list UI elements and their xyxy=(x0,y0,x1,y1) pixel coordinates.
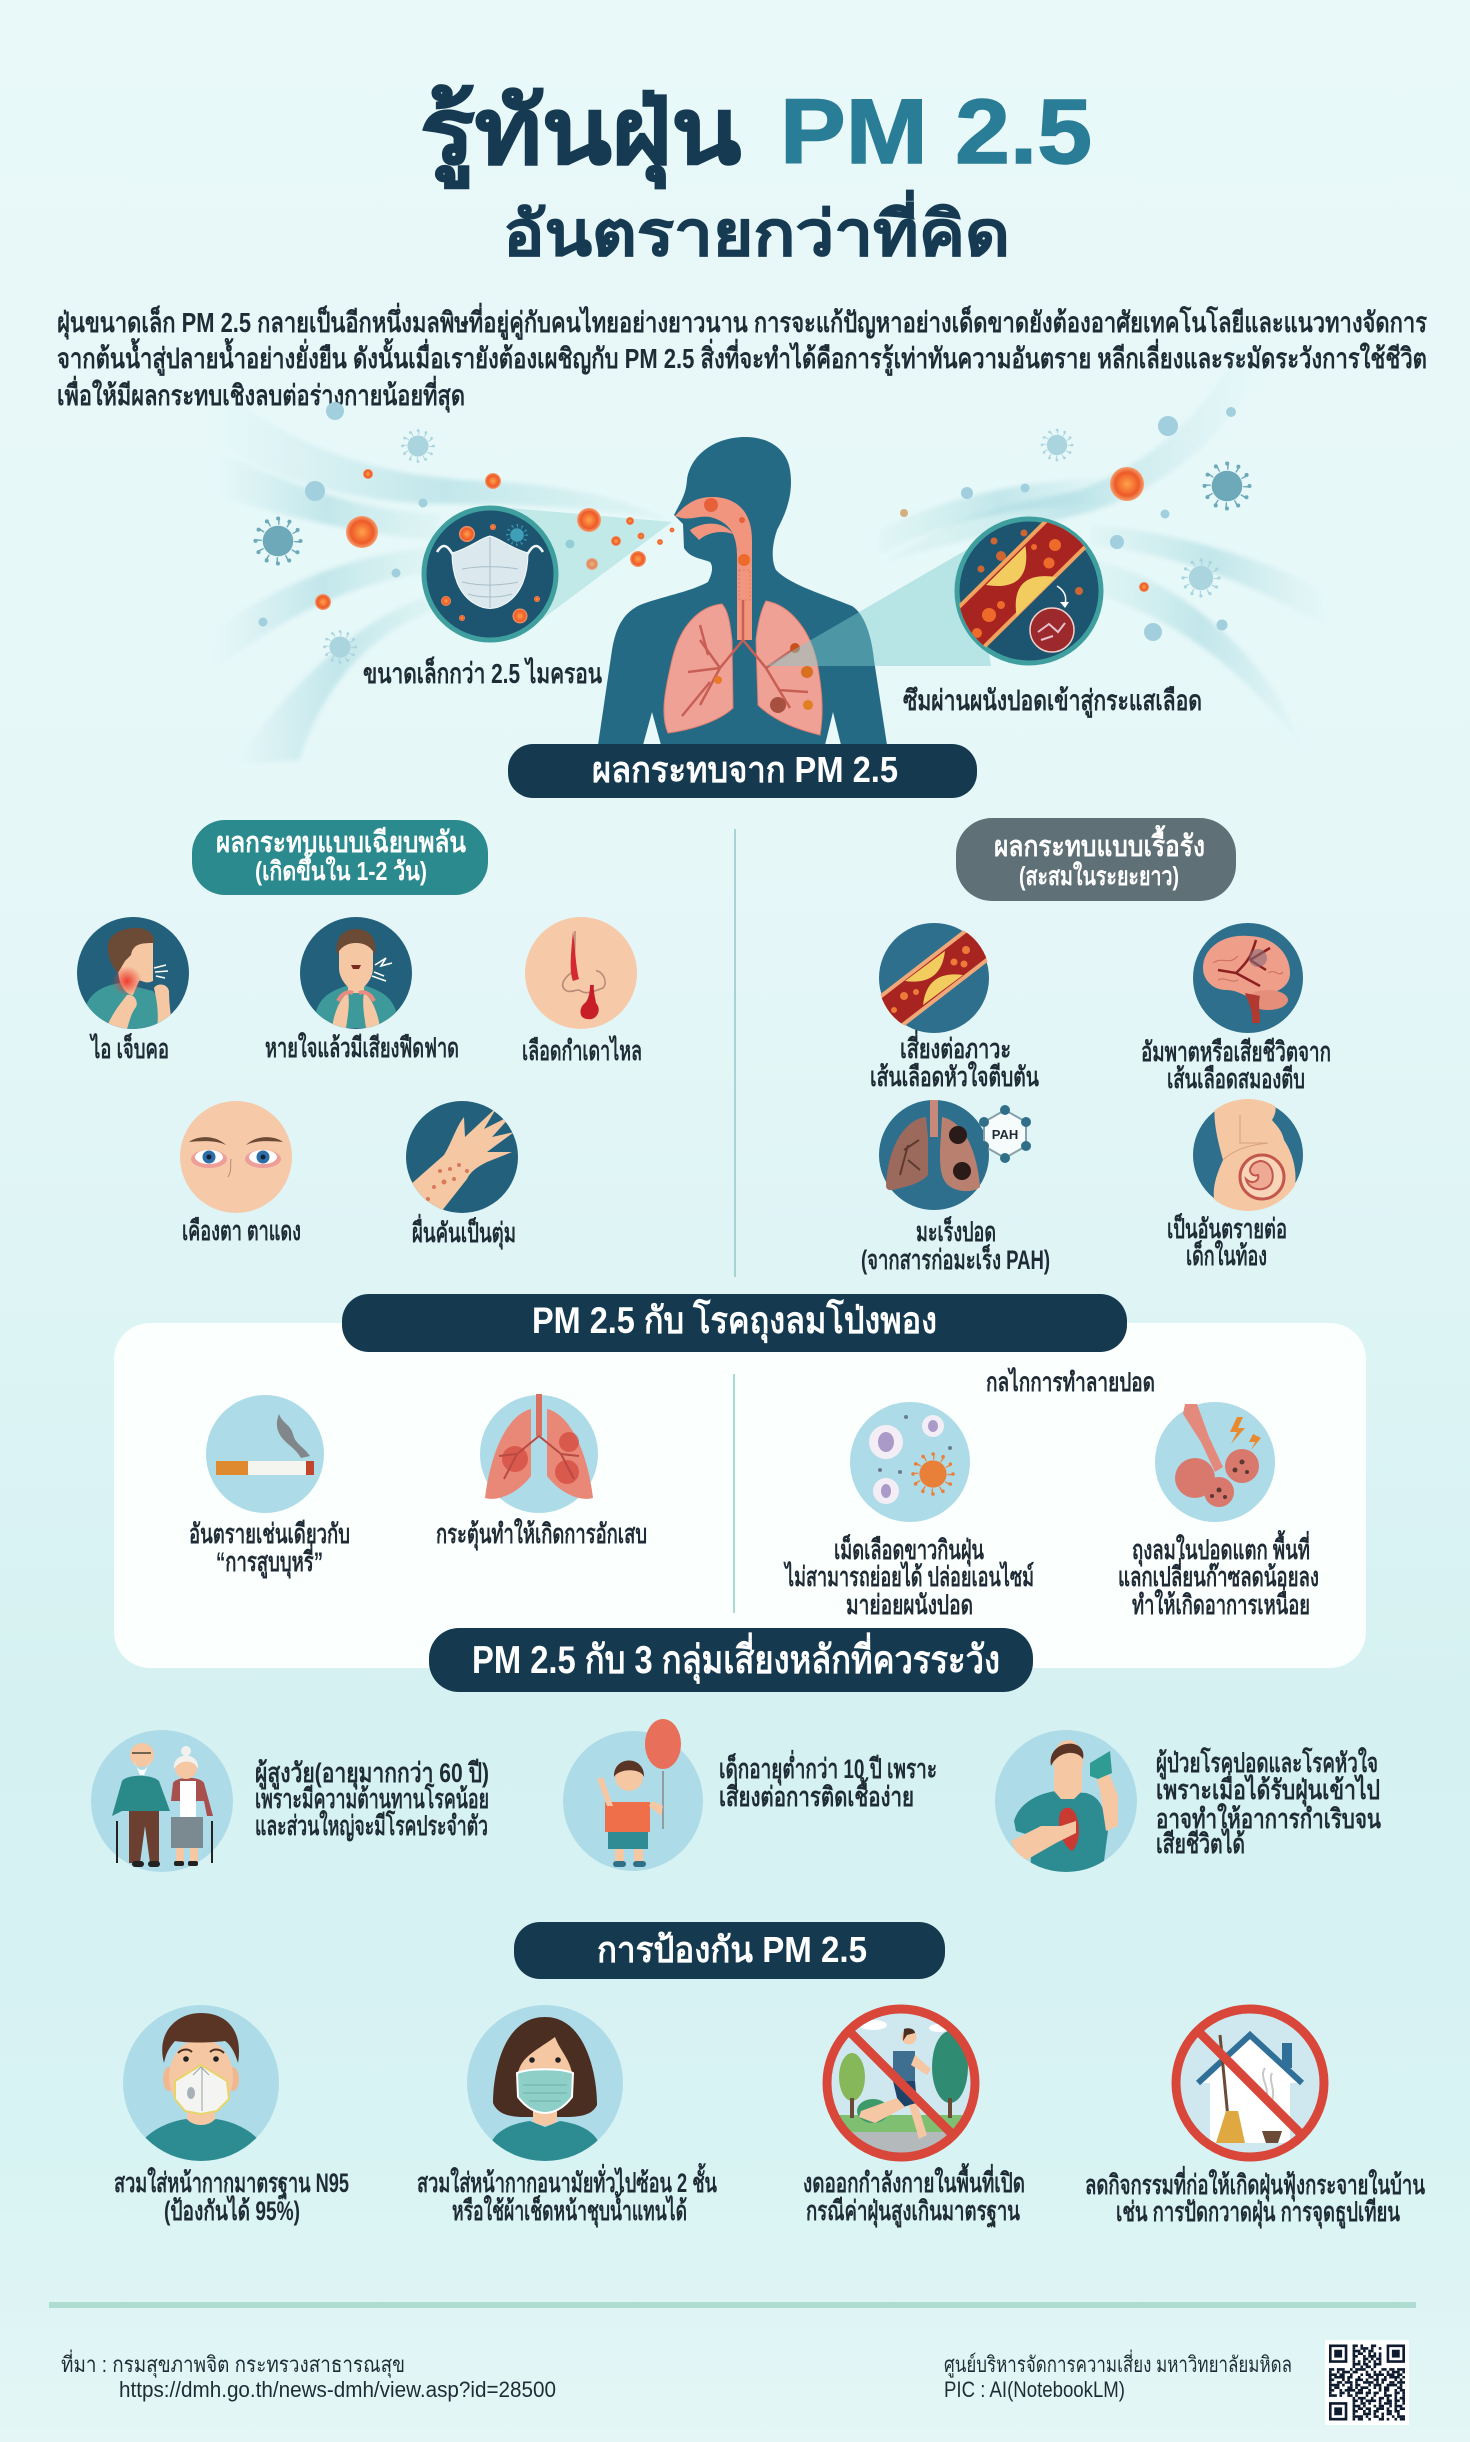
icon: elderly couple xyxy=(91,1730,233,1872)
icon: rash xyxy=(402,1101,518,1217)
label: alveoli: แลกเปลี่ยนก๊าซลดน้อยลง xyxy=(1118,1557,1319,1592)
label: nosebleed: เลือดกำเดาไหล xyxy=(522,1035,642,1066)
intro paragraph: เพื่อให้มีผลกระทบเชิงลบต่อร่างกายน้อยที่สุด xyxy=(57,375,465,413)
label: enters bloodstream: ซึมผ่านผนังปอดเข้าสู่กระแสเลือด xyxy=(903,685,1202,718)
text: elderly xyxy=(255,1758,489,1842)
label: lung cancer: (จากสารก่อมะเร็ง PAH) xyxy=(861,1242,1050,1275)
label: lung cancer: มะเร็งปอด xyxy=(916,1214,996,1247)
label: lung cancer xyxy=(861,1214,1050,1275)
heading: chronic effects xyxy=(956,818,1236,901)
mask circle xyxy=(424,508,556,640)
label: like smoking: อันตรายเช่นเดียวกับ xyxy=(189,1519,350,1549)
icon: patient with inhaler xyxy=(995,1730,1137,1876)
text: patients: อาจทำให้อาการกำเริบจน xyxy=(1156,1803,1381,1834)
text: surgical mask: สวมใส่หน้ากากอนามัยทั่วไปซ้อน 2 ชั้น xyxy=(417,2162,717,2198)
label: alveoli: ทำให้เกิดอาการเหนื่อย xyxy=(1132,1585,1310,1620)
subtitle: อันตรายกว่าที่คิด xyxy=(503,190,1010,269)
title xyxy=(420,81,1092,189)
heading: prevention: การป้องกัน PM 2.5 xyxy=(597,1929,867,1970)
producer credit xyxy=(944,2349,1292,2402)
label: white blood cells: มาย่อยผนังปอด xyxy=(846,1590,973,1620)
icon: cigarette xyxy=(206,1395,324,1513)
magnify cones xyxy=(510,508,672,632)
label: white blood cells: เม็ดเลือดขาวกินฝุ่น xyxy=(834,1532,984,1567)
text: children: เสี่ยงต่อการติดเชื้อง่าย xyxy=(719,1776,914,1812)
label: white blood cells: ไม่สามารถย่อยได้ ปล่อยเอนไซม์ xyxy=(783,1561,1034,1592)
lungs xyxy=(664,600,822,735)
label: coronary risk: เสี่ยงต่อภาวะ xyxy=(900,1029,1011,1064)
text: exercise: กรณีค่าฝุ่นสูงเกินมาตรฐาน xyxy=(806,2196,1020,2229)
right air streams xyxy=(880,345,1330,760)
icon: white blood cells xyxy=(850,1402,970,1522)
label: alveoli: ถุงลมในปอดแตก พื้นที่ xyxy=(1132,1529,1310,1567)
title: รู้ทันฝุ่น xyxy=(420,81,741,189)
icon: no outdoor exercise xyxy=(823,2008,979,2163)
heading: acute effects: (เกิดขึ้นใน 1-2 วัน) xyxy=(255,851,427,886)
heading: emphysema xyxy=(342,1294,1127,1352)
text: surgical mask xyxy=(417,2162,717,2228)
intro paragraph xyxy=(57,302,1427,413)
label: rash: ผื่นคันเป็นตุ่ม xyxy=(412,1213,516,1250)
left air streams xyxy=(215,385,672,765)
heading: risk groups xyxy=(429,1628,1033,1692)
heading: acute effects xyxy=(192,820,488,895)
text: children xyxy=(719,1749,937,1812)
label: fetus: เด็กในท้อง xyxy=(1186,1238,1267,1271)
text: patients: เพราะเมื่อได้รับฝุ่นเข้าไป xyxy=(1156,1770,1380,1807)
hero illustration: PM 2.5 entering the body xyxy=(215,345,1330,765)
icon: N95 mask xyxy=(123,2005,279,2163)
label: fetus xyxy=(1167,1211,1287,1271)
label: cough: ไอ เจ็บคอ xyxy=(89,1031,169,1064)
text: indoor dust xyxy=(1085,2165,1425,2229)
label: like smoking: “การสูบบุหรี่” xyxy=(216,1542,323,1579)
icon: wheezing xyxy=(300,917,412,1029)
label: red eyes: เคืองตา ตาแดง xyxy=(182,1216,301,1246)
PAH molecule xyxy=(979,1105,1031,1163)
icon: cough xyxy=(77,917,189,1033)
icon: brain stroke xyxy=(1193,923,1303,1033)
icon: red eyes xyxy=(180,1101,292,1213)
source credit: ที่มา : กรมสุขภาพจิต กระทรวงสาธารณสุข xyxy=(61,2349,405,2378)
heading: risk groups: PM 2.5 กับ 3 กลุ่มเสี่ยงหลักที่ควรระวัง xyxy=(472,1632,1000,1684)
artery circle xyxy=(954,516,1104,666)
heading: prevention xyxy=(514,1922,945,1979)
icon: fetus xyxy=(1193,1095,1303,1215)
label: coronary risk xyxy=(870,1029,1039,1092)
text: elderly: เพราะมีความต้านทานโรคน้อย xyxy=(255,1782,489,1814)
dust particles and viruses right xyxy=(900,407,1250,641)
label: coronary risk: เส้นเลือดหัวใจตีบตัน xyxy=(870,1061,1039,1092)
text: elderly: และส่วนใหญ่จะมีโรคประจำตัว xyxy=(255,1809,488,1842)
QR code xyxy=(1325,2340,1409,2425)
producer credit: PIC : AI(NotebookLM) xyxy=(944,2377,1125,2402)
heading: acute effects: ผลกระทบแบบเฉียบพลัน xyxy=(216,827,466,859)
title: PM 2.5 xyxy=(780,81,1092,183)
source credit xyxy=(61,2349,556,2402)
text: elderly: ผู้สูงวัย(อายุมากกว่า 60 ปี) xyxy=(255,1758,489,1790)
icon: surgical mask xyxy=(467,2005,623,2163)
source credit: https://dmh.go.th/news-dmh/view.asp?id=28500 xyxy=(119,2377,556,2402)
heading: chronic effects: (สะสมในระยะยาว) xyxy=(1019,861,1179,891)
icon: lung cancer with PAH molecule xyxy=(879,1100,1031,1210)
icon: inflamed lungs xyxy=(480,1394,598,1513)
icon: artery blockage xyxy=(879,923,989,1033)
icon: no indoor dust xyxy=(1175,2008,1325,2158)
label: inflammation: กระตุ้นทำให้เกิดการอักเสบ xyxy=(436,1518,647,1551)
label: like smoking xyxy=(189,1519,350,1579)
text: patients: ผู้ป่วยโรคปอดและโรคหัวใจ xyxy=(1156,1746,1378,1780)
text: exercise: งดออกกำลังกายในพื้นที่เปิด xyxy=(803,2162,1025,2198)
producer credit: ศูนย์บริหารจัดการความเสี่ยง มหาวิทยาลัยมหิดล xyxy=(944,2349,1292,2378)
label: white blood cells xyxy=(783,1532,1034,1620)
text: children: เด็กอายุต่ำกว่า 10 ปี เพราะ xyxy=(719,1749,937,1786)
text: N95: สวมใส่หน้ากากมาตรฐาน N95 xyxy=(114,2167,349,2201)
heading: chronic effects: ผลกระทบแบบเรื้อรัง xyxy=(994,824,1205,863)
panel: emphysema xyxy=(114,1323,1366,1668)
airway xyxy=(675,497,752,640)
label: wheezing: หายใจแล้วมีเสียงฟืดฟาด xyxy=(265,1032,459,1063)
label: fetus: เป็นอันตรายต่อ xyxy=(1167,1211,1287,1244)
text: exercise xyxy=(803,2162,1025,2229)
label: mechanism heading: กลไกการทำลายปอด xyxy=(986,1366,1155,1397)
icon: alveoli xyxy=(1155,1402,1275,1522)
heading: effects xyxy=(508,744,977,798)
text: N95 xyxy=(114,2167,349,2226)
dust particles and viruses left xyxy=(256,402,574,662)
body silhouette xyxy=(598,437,887,745)
PAH molecule: PAH xyxy=(992,1127,1018,1142)
label: stroke: อัมพาตหรือเสียชีวิตจาก xyxy=(1141,1037,1331,1067)
heading: effects: ผลกระทบจาก PM 2.5 xyxy=(592,749,898,790)
text: N95: (ป้องกันได้ 95%) xyxy=(164,2195,300,2226)
label: stroke: เส้นเลือดสมองตีบ xyxy=(1167,1064,1305,1094)
label: alveoli xyxy=(1118,1529,1319,1620)
label: size: ขนาดเล็กกว่า 2.5 ไมครอน xyxy=(363,656,602,689)
label: stroke xyxy=(1141,1037,1331,1094)
text: surgical mask: หรือใช้ผ้าเช็ดหน้าชุบน้ำแทนได้ xyxy=(452,2190,687,2228)
icon: nosebleed xyxy=(525,917,637,1029)
text: patients xyxy=(1156,1746,1381,1859)
arm gaps xyxy=(643,712,841,745)
icon: child with balloon xyxy=(563,1719,703,1871)
heading: emphysema: PM 2.5 กับ โรคถุงลมโป่งพอง xyxy=(532,1298,937,1344)
particles exhaled near nose xyxy=(577,508,674,570)
text: patients: เสียชีวิตได้ xyxy=(1156,1828,1245,1859)
